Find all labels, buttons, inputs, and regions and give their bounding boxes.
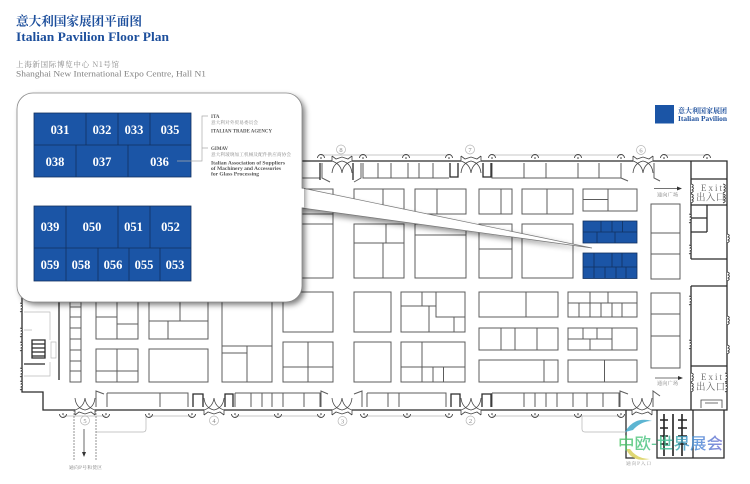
arrows to plaza and P lot: 通向广场: [657, 380, 678, 387]
title: Italian Pavilion Floor Plan: [16, 29, 170, 44]
entrance markers: 6: [639, 148, 643, 154]
booth block: 039–059: 055: [135, 258, 153, 272]
booth block: 039–059: 039: [41, 220, 59, 234]
exit labels: [696, 183, 725, 393]
venue subtitle: 上海新国际博览中心 N1号馆: [16, 59, 120, 70]
doors: [75, 156, 653, 415]
legend: ITA: ITA: [211, 115, 220, 120]
panel: zoomed booth map: [17, 93, 305, 305]
entrance markers: 8: [339, 147, 343, 154]
entrance markers: 4: [212, 418, 216, 425]
callout pointer: [298, 188, 592, 250]
legend: GIMAV: of Machinery and Accessories: [211, 167, 281, 172]
booth block: 031–038: 031: [51, 123, 69, 137]
legend: Italian Pavilion: 意大利国家展团: [678, 106, 727, 116]
floor plan: [20, 145, 730, 471]
legend: ITA: [211, 115, 273, 134]
booth block: 031–038: 037: [93, 155, 111, 169]
legend: Italian Pavilion: [655, 105, 728, 124]
legend: GIMAV: [211, 147, 291, 178]
top perimeter booths: [302, 163, 660, 182]
outer walls: [20, 161, 730, 458]
booth block: 031–038: 033: [125, 123, 143, 137]
legend: ITA: 意大利对外贸易委员会: [211, 119, 258, 126]
title: [16, 10, 170, 44]
booth block: 031–038: 038: [46, 155, 64, 169]
exit labels: 出入口: [696, 379, 725, 393]
booth block: 039–059: 052: [161, 220, 180, 234]
booth block: 039–059: [34, 206, 191, 281]
legend: GIMAV: 意大利玻璃加工机械及配件供应商协会: [211, 151, 291, 158]
exit labels: Exit: [701, 372, 722, 382]
hydrants: [60, 154, 710, 418]
legend: GIMAV: Italian Association of Suppliers: [211, 162, 285, 166]
entrance markers: 2: [469, 418, 472, 425]
watermark logo: 中欧-世界展会: [618, 430, 723, 454]
booth block: 039–059: 050: [83, 220, 101, 234]
venue subtitle: Shanghai New International Expo Centre, Hall N1: [16, 68, 206, 78]
legend: GIMAV: GIMAV: [211, 147, 229, 152]
exit labels: 出入口: [696, 190, 725, 204]
watermark logo: 通向P入口: [626, 460, 651, 467]
venue subtitle: [16, 59, 206, 78]
booth block: 031–038: [34, 113, 191, 177]
arrows to plaza and P lot: 通向P号和货区: [69, 464, 102, 471]
booth block: 031–038: 036: [150, 155, 169, 169]
service lines: [63, 155, 707, 461]
booth block: 039–059: 053: [166, 258, 184, 272]
watermark logo: [618, 420, 723, 467]
arrows to plaza and P lot: [69, 186, 683, 471]
booth block: 039–059: 056: [104, 258, 122, 272]
title: 意大利国家展团平面图: [16, 10, 142, 30]
booth block: 031–038: 035: [161, 123, 179, 137]
entrance markers: 5: [83, 418, 87, 425]
booth block: 039–059: 058: [72, 258, 90, 272]
exhibition booths: [70, 189, 680, 382]
exit labels: Exit: [701, 183, 722, 193]
entrance markers: 7: [468, 147, 472, 154]
booth block: 031–038: 032: [93, 123, 111, 137]
booth block: 039–059: 059: [41, 258, 59, 272]
bottom perimeter booths: [96, 391, 660, 407]
arrows to plaza and P lot: 通向广场: [657, 192, 678, 198]
leader line: [177, 116, 208, 161]
legend: ITA: ITALIAN TRADE AGENCY: [211, 130, 273, 134]
booth block: 039–059: 051: [124, 220, 143, 234]
entrance markers: [80, 145, 646, 426]
highlighted Italian Pavilion booths: [583, 221, 637, 278]
legend: GIMAV: for Glass Processing: [211, 172, 260, 178]
legend: Italian Pavilion: Italian Pavilion: [678, 114, 728, 123]
entrance markers: 3: [341, 418, 344, 426]
